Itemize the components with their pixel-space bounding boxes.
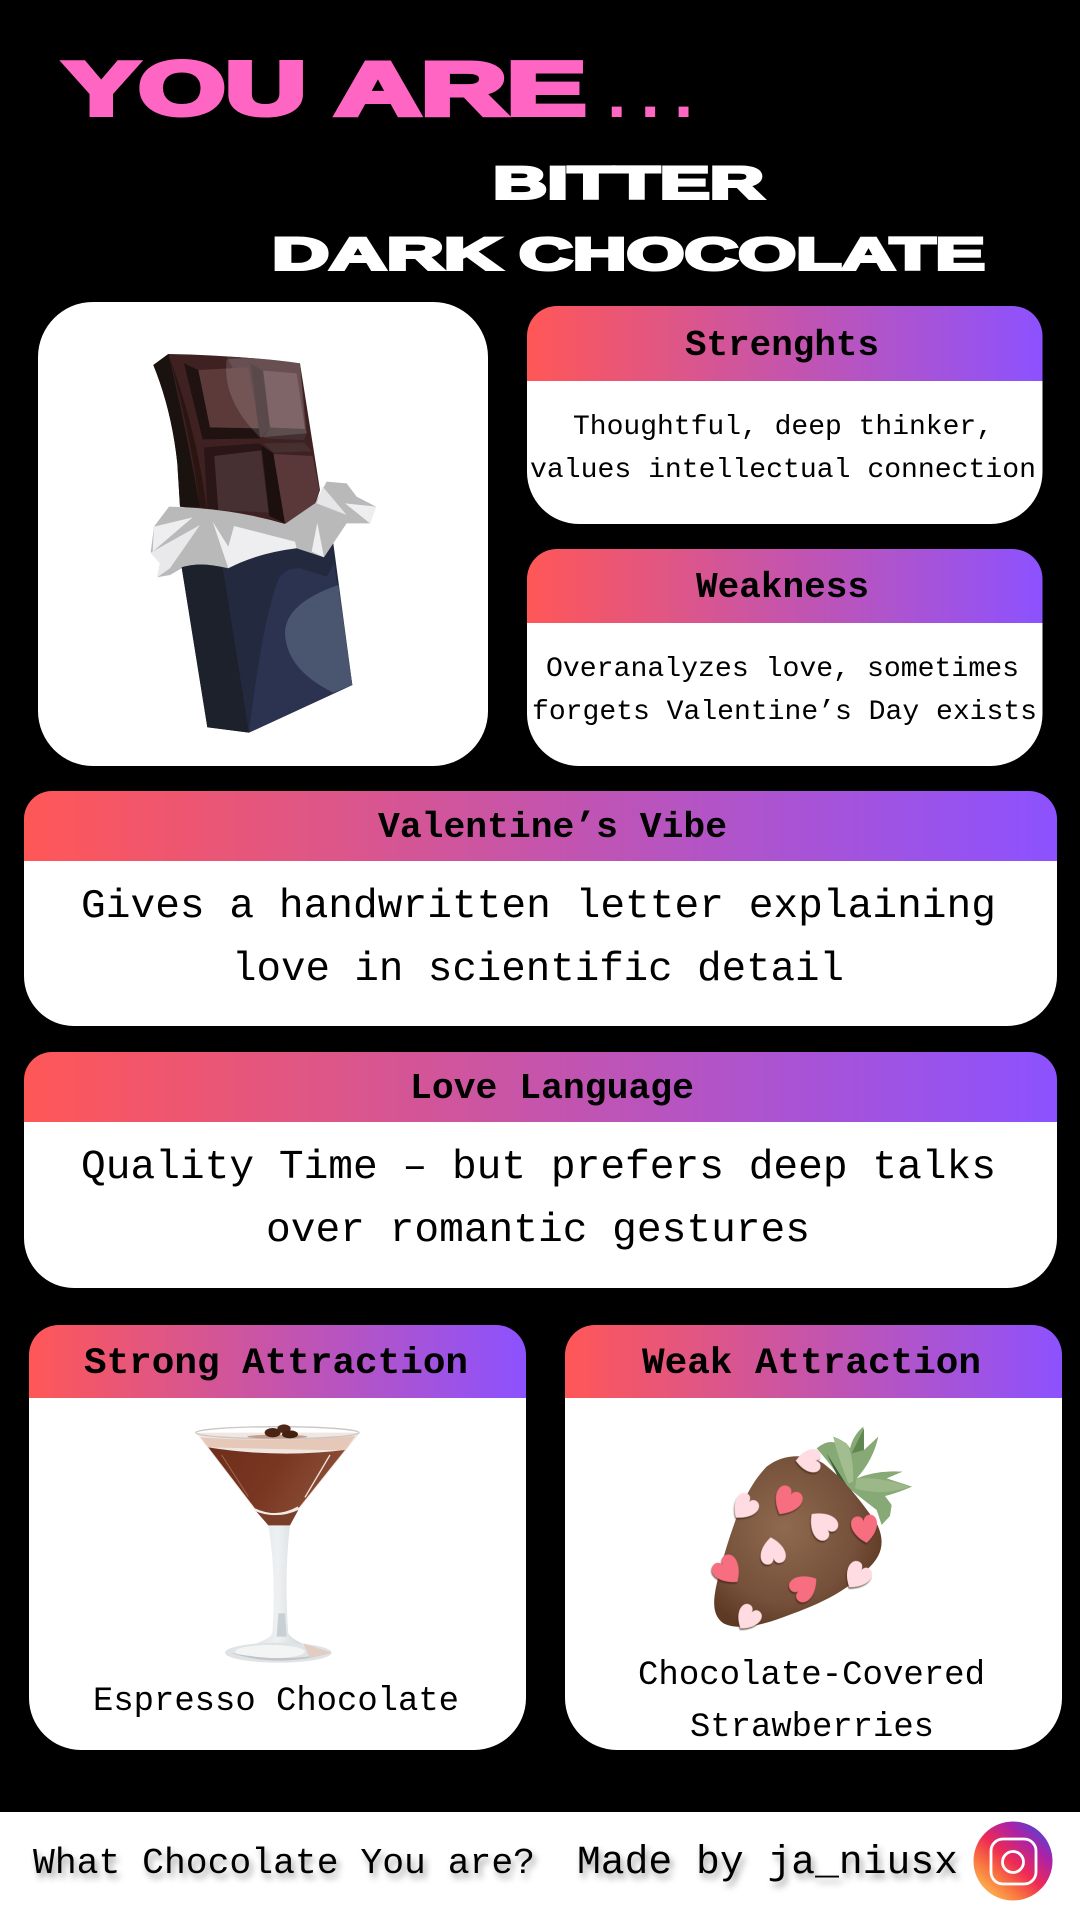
title: you are: YOU — [64, 46, 306, 130]
valentine's vibe title: Valentine’s Vibe — [378, 807, 727, 848]
panel: strong attraction — [29, 1325, 526, 1750]
footer bar — [0, 1812, 1080, 1920]
panel: weakness — [527, 549, 1042, 766]
strong attraction header — [29, 1325, 526, 1398]
weak attraction title: Weak Attraction — [642, 1343, 981, 1385]
chocolate-covered strawberries label: Chocolate-Covered — [638, 1657, 985, 1695]
panel: love language — [24, 1052, 1057, 1288]
hearts — [709, 1449, 880, 1635]
strengths text — [530, 412, 1036, 486]
weakness title: Weakness — [696, 567, 869, 608]
subtitle: bitter dark chocolate — [272, 158, 985, 280]
strong attraction title: Strong Attraction — [84, 1343, 468, 1385]
footer text: Made by ja_niusx — [577, 1840, 958, 1885]
icon: dark chocolate bar — [151, 354, 376, 733]
espresso chocolate label: Espresso Chocolate — [93, 1683, 459, 1721]
wrapper box — [182, 543, 352, 733]
title: you are: ... — [607, 54, 707, 132]
footer text: What Chocolate You are? — [33, 1843, 535, 1884]
love language text: over romantic gestures — [266, 1208, 810, 1254]
subtitle: bitter dark chocolate: CHOCOLATE — [519, 228, 985, 280]
strengths text: Thoughtful, deep thinker, — [573, 412, 993, 443]
panel: chocolate bar image card — [38, 302, 488, 766]
valentine's vibe header — [24, 791, 1057, 861]
love language header — [24, 1052, 1057, 1122]
foil wrapper — [151, 482, 376, 577]
valentine's vibe text: love in scientific detail — [232, 947, 844, 993]
weakness text: Overanalyzes love, sometimes — [546, 654, 1019, 685]
footer text — [33, 1840, 958, 1885]
icon: espresso martini glass — [196, 1424, 360, 1663]
panel: weak attraction — [565, 1325, 1062, 1750]
strengths header — [527, 306, 1042, 381]
chocolate-covered strawberries label — [638, 1657, 985, 1747]
love language title: Love Language — [410, 1068, 694, 1109]
strengths title: Strenghts — [685, 325, 879, 366]
icon: chocolate-covered strawberry — [709, 1427, 912, 1635]
subtitle: bitter dark chocolate: BITTER — [493, 158, 764, 208]
panel: strengths — [527, 306, 1042, 524]
valentine's vibe text: Gives a handwritten letter explaining — [81, 884, 996, 930]
love language text: Quality Time – but prefers deep talks — [81, 1145, 996, 1191]
subtitle: bitter dark chocolate: DARK — [272, 228, 502, 280]
weakness header — [527, 549, 1042, 623]
strengths text: values intellectual connection — [530, 455, 1036, 486]
weak attraction header — [565, 1325, 1062, 1398]
chocolate-covered strawberries label: Strawberries — [690, 1709, 934, 1747]
weakness text: forgets Valentine’s Day exists — [532, 697, 1037, 728]
weakness text — [532, 654, 1037, 728]
icon: instagram — [974, 1822, 1052, 1900]
panel: valentine's vibe — [24, 791, 1057, 1026]
leaves — [817, 1427, 912, 1525]
title: you are — [64, 46, 707, 132]
valentine's vibe text — [81, 884, 996, 993]
love language text — [81, 1145, 996, 1254]
title: you are: ARE — [335, 46, 586, 130]
